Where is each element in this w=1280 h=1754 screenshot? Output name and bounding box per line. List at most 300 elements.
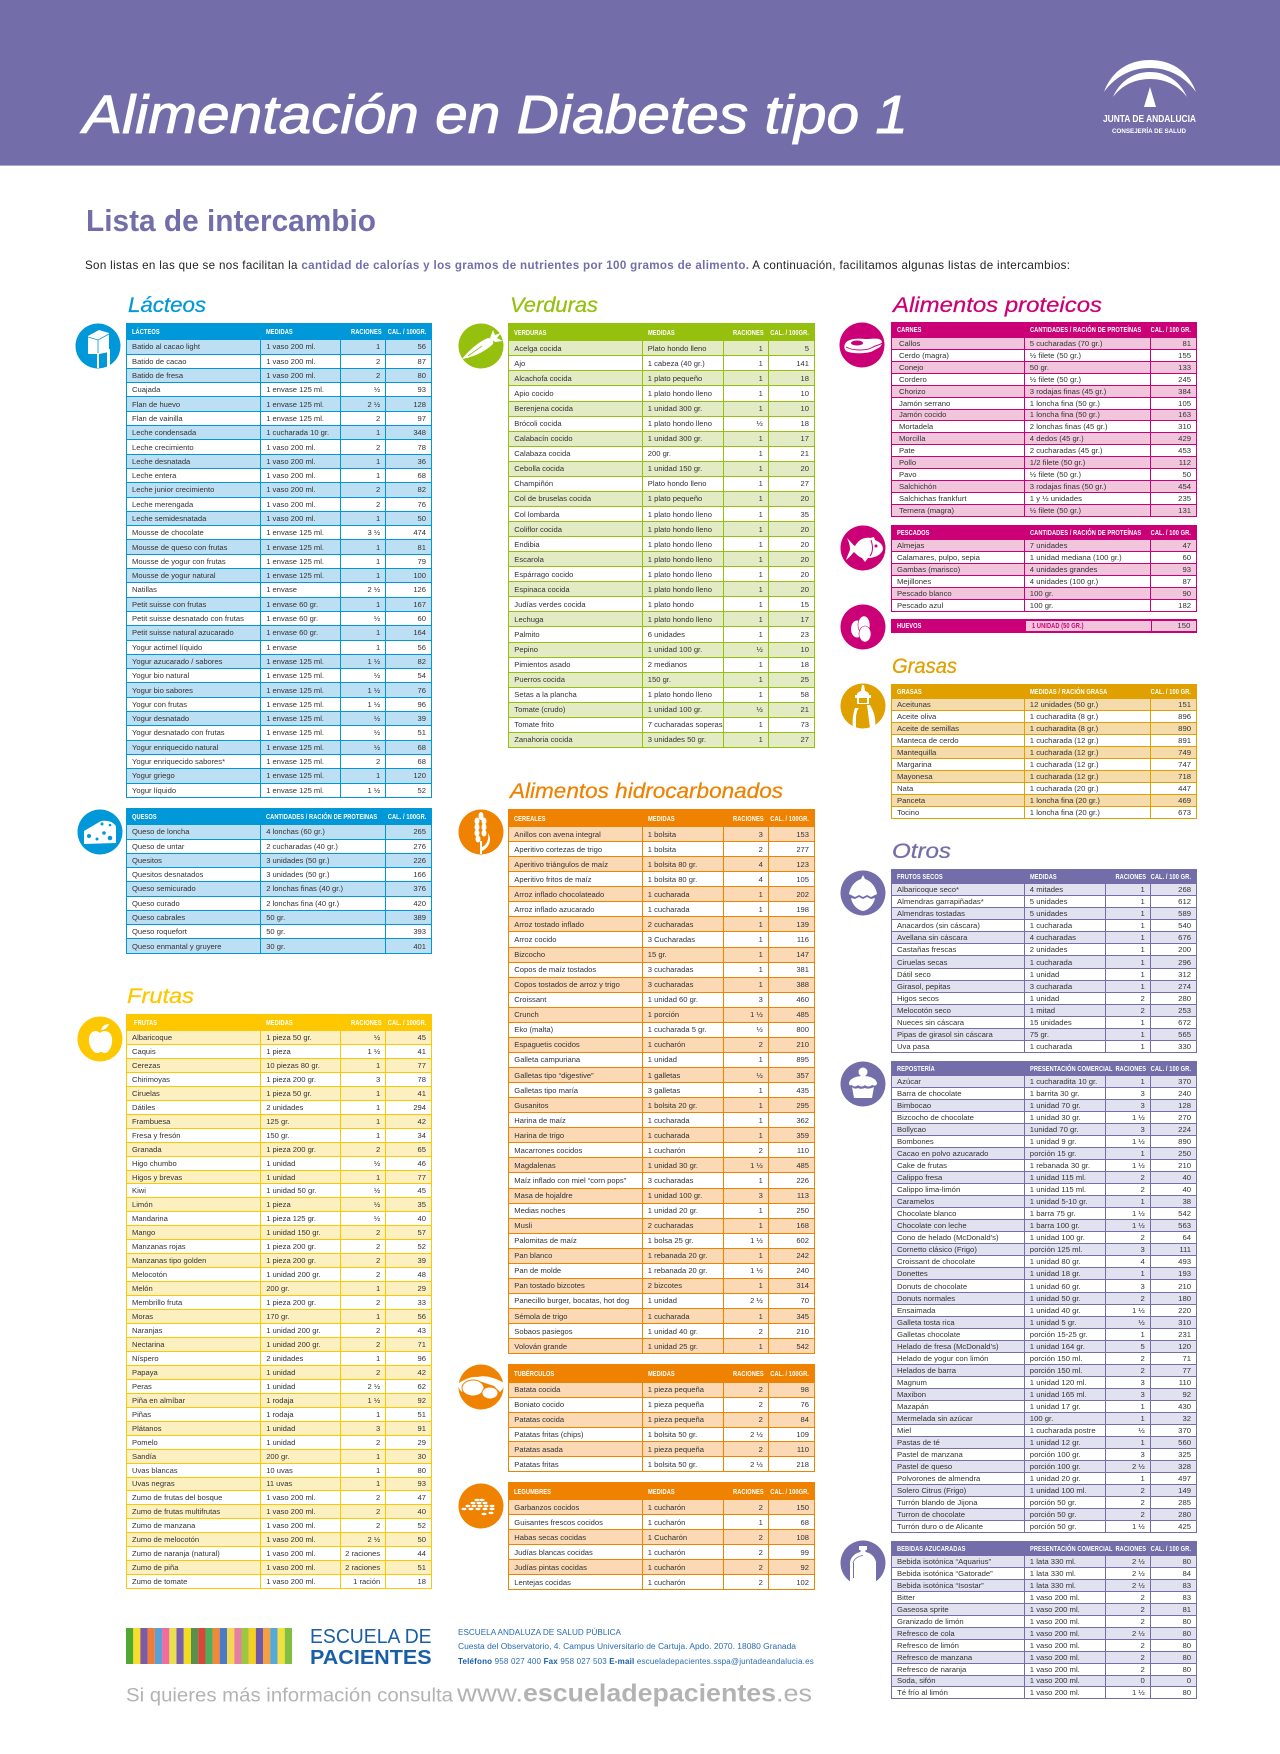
- table rows: frutas: 1 rodaja: [266, 1410, 294, 1419]
- footer logo text: [310, 1626, 432, 1666]
- table rows: frutas: 1 unidad 200 gr.: [266, 1340, 321, 1349]
- table rows: repostería: Cornetto clásico (Frigo): [897, 1245, 977, 1254]
- table rows: lácteos: Leche desnatada: [132, 457, 190, 466]
- table rows: repostería: 231: [1178, 1330, 1191, 1339]
- table rows: cereales: Harina de maíz: [514, 1116, 566, 1125]
- table rows: cereales: 110: [797, 1146, 809, 1155]
- table rows: frutas: Higo chumbo: [132, 1159, 177, 1168]
- table rows: lácteos: 1: [376, 342, 380, 351]
- table rows: frutas: Membrillo fruta: [132, 1298, 182, 1307]
- table rows: cereales: 381: [796, 965, 809, 974]
- table rows: cereales: 1: [759, 965, 763, 974]
- table rows: verduras: Plato hondo lleno: [648, 344, 706, 353]
- table rows: cereales: 435: [796, 1086, 809, 1095]
- table rows: quesos: 393: [413, 927, 426, 936]
- table rows: frutas: Pomelo: [132, 1438, 158, 1447]
- table header: bebidas azucaradas: [892, 1542, 1196, 1555]
- table rows: legumbres: 1 cucharón: [648, 1518, 685, 1527]
- table header: bebidas azucaradas: CAL. / 100 GR.: [1151, 1544, 1191, 1553]
- table header: pescados: [892, 526, 1196, 539]
- table rows: lácteos: 39: [418, 714, 426, 723]
- table rows: verduras: Lechuga: [514, 615, 543, 624]
- table rows: carnes: 50 gr.: [1030, 363, 1049, 372]
- footer website line: [126, 1682, 812, 1708]
- table rows: repostería: Cake de frutas: [897, 1161, 947, 1170]
- table rows: repostería: ½: [1138, 1318, 1145, 1327]
- icon: nut: [838, 868, 888, 918]
- table rows: frutos secos: 280: [1178, 994, 1191, 1003]
- table rows: grasas: 1 cucharada (20 gr.): [1030, 784, 1099, 793]
- table rows: verduras: 1 unidad 300 gr.: [648, 434, 702, 443]
- table rows: verduras: 141: [796, 359, 809, 368]
- table rows: verduras: 1 plato hondo lleno: [648, 540, 712, 549]
- table header: pescados: PESCADOS: [897, 528, 930, 537]
- table rows: verduras: 200 gr.: [648, 449, 671, 458]
- table rows: verduras: 1: [759, 479, 763, 488]
- table rows: frutos secos: 1: [1140, 921, 1145, 930]
- table rows: lácteos: 78: [418, 443, 426, 452]
- table rows: frutas: Caquis: [132, 1047, 156, 1056]
- table rows: repostería: 1 ½: [1132, 1522, 1145, 1531]
- table rows: verduras: Espinaca cocida: [514, 585, 570, 594]
- table rows: frutos secos: 15 unidades: [1030, 1018, 1072, 1027]
- table rows: cereales: 460: [796, 995, 809, 1004]
- table rows: lácteos: 1 envase 60 gr.: [266, 628, 318, 637]
- table rows: pescados: 1 unidad mediana (100 gr.): [1030, 553, 1122, 562]
- table rows: verduras: 1: [759, 374, 763, 383]
- table rows: verduras: 1: [759, 525, 763, 534]
- table header: frutas: RACIONES: [351, 1018, 381, 1027]
- table rows: cereales: 1 porción: [648, 1010, 679, 1019]
- table rows: lácteos: 1 envase 125 ml.: [266, 714, 324, 723]
- huevos calories cell: [1152, 621, 1196, 631]
- table rows: repostería: 64: [1182, 1233, 1191, 1242]
- table rows: verduras: 1: [759, 510, 763, 519]
- table rows: repostería: [892, 1075, 1196, 1532]
- table rows: frutas: Peras: [132, 1382, 152, 1391]
- table rows: grasas: Mayonesa: [897, 772, 932, 781]
- table rows: lácteos: Flan de huevo: [132, 400, 180, 409]
- table rows: frutas: 200 gr.: [266, 1452, 289, 1461]
- table rows: frutas: 1 vaso 200 ml.: [266, 1507, 316, 1516]
- table rows: cereales: 210: [796, 1327, 809, 1336]
- table rows: frutas: 33: [418, 1298, 426, 1307]
- table rows: cereales: Volován grande: [514, 1342, 567, 1351]
- table rows: frutas: 48: [418, 1270, 426, 1279]
- table rows: bebidas azucaradas: 2: [1140, 1653, 1145, 1662]
- table header: bebidas azucaradas: RACIONES: [1115, 1544, 1146, 1553]
- table rows: verduras: 20: [801, 464, 809, 473]
- table rows: frutas: 1: [376, 1284, 380, 1293]
- table rows: lácteos: 1 envase 125 ml.: [266, 557, 324, 566]
- table rows: verduras: 10: [801, 645, 809, 654]
- table rows: lácteos: 97: [418, 414, 426, 423]
- table rows: repostería: 1: [1140, 1197, 1145, 1206]
- table rows: frutas: 18: [418, 1577, 426, 1586]
- table rows: cereales: Eko (malta): [514, 1025, 553, 1034]
- table rows: verduras: Champiñón: [514, 479, 553, 488]
- table header: verduras: CAL. / 100GR.: [770, 328, 809, 337]
- table rows: frutas: 40: [418, 1214, 426, 1223]
- table rows: verduras: Endibia: [514, 540, 540, 549]
- table rows: frutas: 92: [418, 1396, 426, 1405]
- table rows: repostería: Calippo fresa: [897, 1173, 942, 1182]
- table rows: repostería: Ensaimada: [897, 1306, 935, 1315]
- table rows: repostería: 3: [1140, 1245, 1145, 1254]
- table rows: verduras: 1: [759, 585, 763, 594]
- table rows: frutas: 1 unidad 200 gr.: [266, 1270, 321, 1279]
- table rows: lácteos: Yogur bio sabores: [132, 686, 193, 695]
- table rows: frutas: 52: [418, 1521, 426, 1530]
- table rows: grasas: 12 unidades (50 gr.): [1030, 700, 1098, 709]
- table rows: verduras: Col de bruselas cocida: [514, 494, 591, 503]
- table rows: repostería: 100 gr.: [1030, 1414, 1053, 1423]
- table: pescados: [891, 525, 1197, 612]
- table rows: pescados: 7 unidades: [1030, 541, 1067, 550]
- table rows: bebidas azucaradas: 81: [1182, 1605, 1191, 1614]
- table rows: frutas: 2: [376, 1228, 380, 1237]
- table header: verduras: VERDURAS: [514, 328, 547, 337]
- table rows: frutos secos: 1: [1140, 1042, 1145, 1051]
- table rows: cereales: 1 bolsita: [648, 845, 676, 854]
- table rows: cereales: 210: [796, 1040, 809, 1049]
- table rows: legumbres: 2: [759, 1578, 763, 1587]
- table rows: repostería: 1 ½: [1132, 1161, 1145, 1170]
- table rows: tubérculos: 2 ½: [750, 1460, 763, 1469]
- table rows: quesos: 376: [413, 884, 426, 893]
- table rows: grasas: 747: [1178, 760, 1191, 769]
- table rows: lácteos: 1 envase 125 ml.: [266, 671, 324, 680]
- table rows: bebidas azucaradas: 80: [1182, 1629, 1191, 1638]
- table rows: lácteos: 1: [376, 771, 380, 780]
- table rows: frutas: Moras: [132, 1312, 153, 1321]
- table rows: repostería: Caramelos: [897, 1197, 934, 1206]
- table rows: lácteos: 1: [376, 557, 380, 566]
- table rows: repostería: Pastel de queso: [897, 1462, 952, 1471]
- table rows: frutos secos: Ciruelas secas: [897, 958, 947, 966]
- table rows: repostería: 890: [1178, 1137, 1191, 1146]
- table rows: verduras: 1: [759, 630, 763, 639]
- table rows: verduras: ½: [756, 645, 763, 654]
- table rows: repostería: 560: [1178, 1438, 1191, 1447]
- table rows: cereales: 3 cucharadas: [648, 980, 693, 989]
- table rows: frutos secos: Albaricoque seco*: [897, 885, 959, 894]
- table rows: cereales: 1: [759, 920, 763, 929]
- table rows: cereales: 359: [796, 1131, 809, 1140]
- table rows: frutos secos: 589: [1178, 909, 1191, 918]
- table rows: frutas: 1: [376, 1117, 380, 1126]
- panel: lácteos: [76, 294, 432, 954]
- table rows: frutas: 2: [376, 1340, 380, 1349]
- table rows: legumbres: 1: [759, 1518, 763, 1527]
- table rows: cereales: 1 cucharada: [648, 1312, 690, 1321]
- table header: bebidas azucaradas: BEBIDAS AZUCARADAS: [897, 1544, 966, 1553]
- table rows: frutas: 43: [418, 1326, 426, 1335]
- table rows: lácteos: 100: [413, 571, 426, 580]
- table rows: cereales: Harina de trigo: [514, 1131, 564, 1140]
- table header: pescados: CANTIDADES / RACIÓN DE PROTEÍNAS: [1030, 528, 1141, 537]
- table rows: lácteos: 3 ½: [368, 528, 380, 537]
- table rows: lácteos: Yogur líquido: [132, 786, 176, 795]
- table rows: repostería: Bombones: [897, 1137, 934, 1146]
- table rows: carnes: Jamón cocido: [899, 410, 946, 419]
- table rows: cereales: 295: [796, 1101, 809, 1110]
- table rows: lácteos: Petit suisse desnatado con frutas: [132, 614, 244, 623]
- table rows: repostería: 1: [1140, 1438, 1145, 1447]
- title: Alimentación en Diabetes tipo 1: [80, 85, 908, 145]
- table rows: lácteos: 82: [418, 485, 426, 494]
- table rows: bebidas azucaradas: 0: [1140, 1676, 1145, 1685]
- table rows: lácteos: 1 envase: [266, 585, 297, 594]
- table rows: verduras: 20: [801, 570, 809, 579]
- table rows: tubérculos: 2: [759, 1385, 763, 1394]
- table rows: repostería: 1: [1140, 1149, 1145, 1158]
- table rows: cereales: 1: [759, 1176, 763, 1185]
- table rows: carnes: 1 y ½ unidades: [1030, 494, 1082, 503]
- table rows: verduras: 1 plato hondo lleno: [648, 615, 712, 624]
- table rows: frutos secos: 5 unidades: [1030, 909, 1067, 918]
- table rows: repostería: 1 barra 100 gr.: [1030, 1221, 1080, 1230]
- table rows: verduras: 1: [759, 359, 763, 368]
- table rows: frutas: 1: [376, 1354, 380, 1363]
- table rows: legumbres: Guisantes frescos cocidos: [514, 1518, 603, 1527]
- table rows: lácteos: 1 envase 125 ml.: [266, 543, 324, 552]
- table rows: bebidas azucaradas: Soda, sifón: [897, 1676, 935, 1685]
- table rows: lácteos: Batido al cacao light: [132, 342, 200, 351]
- panel: grasas: [840, 655, 1197, 819]
- table rows: repostería: porción 50 gr.: [1030, 1498, 1076, 1507]
- table rows: cereales: 485: [796, 1010, 809, 1019]
- table rows: frutas: ½: [374, 1159, 380, 1168]
- table rows: frutas: 1 unidad: [266, 1172, 295, 1182]
- table rows: tubérculos: 1 pieza pequeña: [648, 1445, 704, 1454]
- table rows: cereales: 202: [796, 890, 809, 899]
- table rows: frutos secos: 1: [1140, 909, 1145, 918]
- table rows: bebidas azucaradas: 1 lata 330 ml.: [1030, 1581, 1076, 1590]
- table rows: frutos secos: 1 cucharada: [1030, 1042, 1072, 1051]
- table rows: repostería: porción 15 gr.: [1030, 1149, 1076, 1158]
- table rows: lácteos: 1 envase 125 ml.: [266, 400, 324, 409]
- table rows: carnes: 50: [1182, 470, 1191, 479]
- table rows: lácteos: Yogur azucarado / sabores: [132, 657, 222, 666]
- table rows: repostería: 2: [1140, 1354, 1145, 1363]
- table header: frutas: FRUTAS: [134, 1018, 157, 1027]
- table rows: lácteos: 1 envase 125 ml.: [266, 528, 324, 537]
- table rows: frutas: Manzanas rojas: [132, 1242, 186, 1251]
- table rows: verduras: 20: [801, 585, 809, 594]
- table rows: frutos secos: Girasol, pepitas: [897, 982, 950, 991]
- table header: bebidas azucaradas: PRESENTACIÓN COMERCIAL: [1030, 1544, 1112, 1553]
- table rows: frutas: ½: [374, 1200, 380, 1209]
- table rows: verduras: 1 unidad 300 gr.: [648, 404, 702, 413]
- table: verduras: [508, 323, 815, 748]
- table rows: frutas: 1 unidad: [266, 1368, 295, 1377]
- table rows: verduras: 1: [759, 690, 763, 699]
- table rows: bebidas azucaradas: Bebida isotónica “Aquarius”: [897, 1557, 991, 1566]
- table rows: frutos secos: 672: [1178, 1018, 1191, 1027]
- table rows: frutos secos: 2 unidades: [1030, 945, 1067, 954]
- icon: drink bottle: [838, 1538, 888, 1588]
- table rows: quesos: 420: [413, 899, 426, 908]
- table rows: legumbres: Lentejas cocidas: [514, 1578, 571, 1587]
- table rows: repostería: 1: [1140, 1269, 1145, 1278]
- table rows: frutas: 1 pieza 200 gr.: [266, 1242, 316, 1251]
- table rows: verduras: ½: [756, 419, 763, 428]
- table rows: cereales: 240: [796, 1266, 809, 1275]
- table: repostería: [891, 1061, 1197, 1533]
- table header: cereales: [509, 810, 814, 826]
- table rows: repostería: Helado de fresa (McDonald’s): [897, 1342, 999, 1351]
- table header: tubérculos: CAL. / 100GR.: [770, 1369, 809, 1378]
- table rows: bebidas azucaradas: Gaseosa sprite: [897, 1605, 949, 1614]
- table rows: verduras: 20: [801, 555, 809, 564]
- table rows: frutas: 34: [418, 1131, 426, 1140]
- table rows: repostería: 38: [1182, 1197, 1191, 1206]
- panel: frutas: [78, 985, 432, 1589]
- table: frutas: [126, 1014, 432, 1589]
- table rows: cereales: 345: [796, 1312, 809, 1321]
- table rows: verduras: 1 unidad 100 gr.: [648, 705, 702, 714]
- table rows: repostería: Helado de yogur con limón: [897, 1354, 988, 1363]
- table rows: cereales: 1 bolsita 20 gr.: [648, 1101, 697, 1110]
- table rows: grasas: 891: [1178, 736, 1191, 745]
- table rows: carnes: Cordero: [899, 375, 927, 384]
- table rows: carnes: Pavo: [899, 470, 917, 479]
- table rows: repostería: 1 cucharada postre: [1030, 1426, 1096, 1435]
- table header: tubérculos: RACIONES: [733, 1369, 764, 1378]
- table rows: cereales: 3 cucharadas: [648, 1176, 693, 1185]
- table rows: lácteos: 1 vaso 200 ml.: [266, 443, 316, 452]
- table rows: repostería: 1 unidad 100 gr.: [1030, 1233, 1085, 1242]
- table rows: frutos secos: 4 mitades: [1030, 885, 1063, 894]
- table rows: frutas: 294: [413, 1103, 426, 1112]
- table rows: legumbres: 92: [801, 1563, 809, 1572]
- table rows: frutos secos: [892, 883, 1196, 1052]
- table rows: frutos secos: Almendras garrapiñadas*: [897, 897, 984, 906]
- table rows: cereales: 1 cucharada 5 gr.: [648, 1025, 706, 1034]
- table rows: grasas: Manteca de cerdo: [897, 736, 959, 745]
- table rows: verduras: 18: [801, 374, 809, 383]
- table rows: lácteos: 1 envase 125 ml.: [266, 786, 324, 795]
- table rows: quesos: Queso enmantal y gruyere: [132, 942, 222, 951]
- table rows: cereales: 1: [759, 1055, 763, 1064]
- table rows: grasas: Aceite de semillas: [897, 724, 959, 733]
- table rows: frutas: 1 vaso 200 ml.: [266, 1521, 316, 1530]
- table rows: repostería: 270: [1178, 1113, 1191, 1122]
- table: carnes: [891, 322, 1197, 517]
- table rows: frutas: 77: [418, 1172, 426, 1182]
- table: legumbres: [508, 1482, 815, 1590]
- table rows: lácteos: 1 ½: [368, 686, 380, 695]
- table rows: repostería: Barra de chocolate: [897, 1089, 962, 1098]
- table rows: repostería: 542: [1178, 1209, 1191, 1218]
- table rows: verduras: 1: [759, 494, 763, 503]
- table rows: legumbres: 99: [801, 1548, 809, 1557]
- table rows: frutos secos: 253: [1178, 1006, 1191, 1015]
- table rows: lácteos: 76: [418, 686, 426, 695]
- table rows: tubérculos: 84: [801, 1415, 809, 1424]
- table rows: verduras: 1 cabeza (40 gr.): [648, 359, 705, 368]
- table rows: repostería: Mermelada sin azúcar: [897, 1414, 973, 1423]
- table rows: frutas: 10 piezas 80 gr.: [266, 1061, 320, 1070]
- table rows: cereales: 1 unidad: [648, 1055, 677, 1064]
- table rows: verduras: 23: [801, 630, 809, 639]
- table rows: repostería: 563: [1178, 1221, 1191, 1230]
- table header: tubérculos: [509, 1365, 814, 1382]
- table rows: frutas: 1 unidad 150 gr.: [266, 1228, 321, 1237]
- table rows: verduras: 1 plato hondo lleno: [648, 510, 712, 519]
- table rows: verduras: 21: [801, 449, 809, 458]
- table rows: frutas: 200 gr.: [266, 1284, 289, 1293]
- table rows: frutas: 41: [418, 1089, 426, 1098]
- table rows: cereales: Aperitivo fritos de maíz: [514, 875, 592, 884]
- table rows: frutos secos: Uva pasa: [897, 1042, 929, 1051]
- table rows: repostería: 3: [1140, 1390, 1145, 1399]
- table rows: cereales: Arroz inflado azucarado: [514, 905, 594, 914]
- table rows: frutas: Zumo de frutas multifrutas: [132, 1507, 220, 1516]
- table rows: bebidas azucaradas: [892, 1555, 1196, 1698]
- table header: verduras: [509, 324, 814, 340]
- table rows: cereales: 357: [796, 1071, 809, 1080]
- table rows: frutas: 2: [376, 1493, 380, 1502]
- table rows: frutas: 2 ½: [368, 1382, 380, 1391]
- table rows: cereales: Medias noches: [514, 1206, 565, 1215]
- table rows: cereales: 1: [759, 1342, 763, 1351]
- table rows: frutas: 2 ½: [368, 1535, 380, 1544]
- table rows: carnes: 4 dedos (45 gr.): [1030, 434, 1084, 443]
- table: quesos: [126, 808, 432, 954]
- table rows: repostería: 2: [1140, 1498, 1145, 1507]
- table rows: repostería: Galletas chocolate: [897, 1330, 960, 1339]
- table rows: bebidas azucaradas: 80: [1182, 1665, 1191, 1674]
- table rows: cereales: 1: [759, 905, 763, 914]
- table rows: cereales: 1 cucharada: [648, 890, 690, 899]
- table rows: frutas: Zumo de manzana: [132, 1521, 195, 1530]
- table rows: frutos secos: 1: [1140, 897, 1145, 906]
- table rows: repostería: 210: [1178, 1161, 1191, 1170]
- table rows: legumbres: Judías pintas cocidas: [514, 1563, 587, 1572]
- table rows: repostería: 3: [1140, 1089, 1145, 1098]
- table rows: frutas: 52: [418, 1242, 426, 1251]
- table rows: grasas: 896: [1178, 712, 1191, 721]
- table rows: cereales: 15 gr.: [648, 950, 667, 959]
- table rows: repostería: 1 unidad 20 gr.: [1030, 1474, 1081, 1483]
- table rows: tubérculos: Patatas cocida: [514, 1415, 564, 1424]
- table rows: grasas: 1 cucharada (12 gr.): [1030, 736, 1099, 745]
- table rows: carnes: ½ filete (50 gr.): [1030, 375, 1081, 384]
- table rows: carnes: Morcilla: [899, 434, 925, 443]
- table rows: cereales: Espaguetis cocidos: [514, 1040, 580, 1049]
- table rows: frutas: 1: [376, 1312, 380, 1321]
- table rows: lácteos: Leche crecimiento: [132, 443, 194, 452]
- table rows: repostería: 71: [1182, 1354, 1191, 1363]
- table rows: cereales: 3 galletas: [648, 1086, 680, 1095]
- table rows: carnes: 1 loncha fina (50 gr.): [1030, 410, 1100, 419]
- table rows: tubérculos: 2 ½: [750, 1430, 763, 1439]
- table header: frutas: MEDIDAS: [266, 1018, 293, 1027]
- table rows: frutas: 1: [376, 1061, 380, 1070]
- table rows: repostería: 1 ½: [1132, 1209, 1145, 1218]
- table rows: carnes: [892, 337, 1196, 516]
- table rows: pescados: 87: [1182, 577, 1191, 586]
- table header: quesos: [127, 809, 431, 824]
- table rows: verduras: 20: [801, 494, 809, 503]
- table rows: verduras: Judías verdes cocida: [514, 600, 586, 609]
- table rows: frutas: 2: [376, 1256, 380, 1265]
- table rows: repostería: porción 150 ml.: [1030, 1354, 1082, 1363]
- table rows: cereales: 147: [796, 950, 809, 959]
- table rows: frutos secos: Dátil seco: [897, 970, 931, 979]
